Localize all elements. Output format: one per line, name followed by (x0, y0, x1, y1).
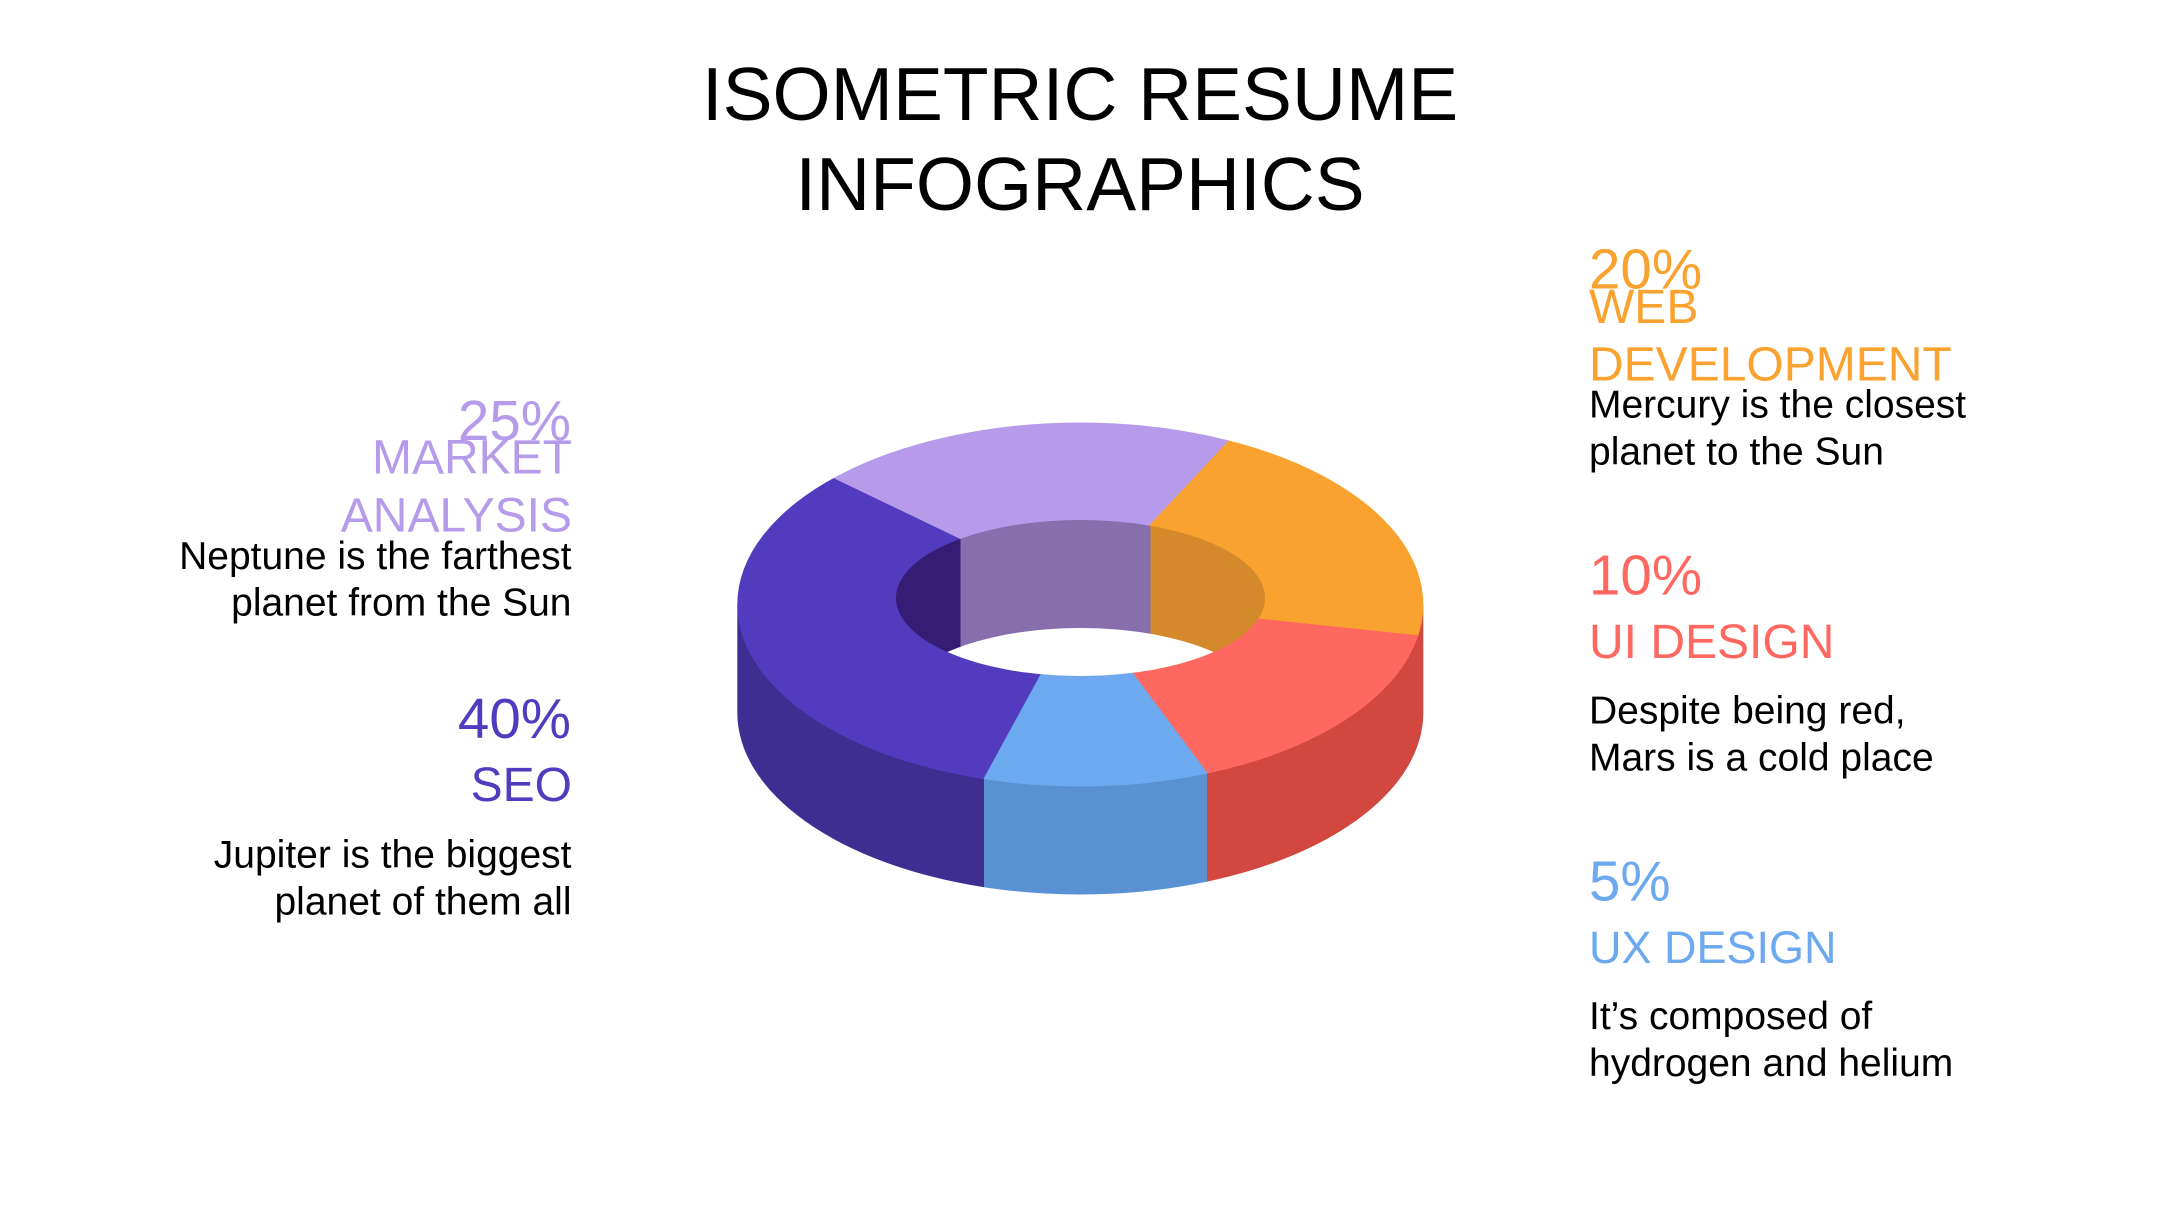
title: INFOGRAPHICS (795, 142, 1365, 226)
callout: SEO 40%: planet of them all (274, 880, 572, 924)
top segment: web development (1149, 440, 1424, 636)
callout: UX design 5%: UX DESIGN (1589, 922, 1837, 973)
callout: UI design 10%: Mars is a cold place (1589, 736, 1934, 780)
side wall: SEO (737, 604, 984, 887)
callout: UI design 10% (1589, 544, 1934, 780)
callout: UX design 5%: hydrogen and helium (1589, 1042, 1953, 1085)
top segment: UI design (1132, 618, 1418, 774)
side wall: UI design (1207, 604, 1423, 882)
callout: UI design 10%: Despite being red, (1589, 690, 1906, 732)
inner hole walls (896, 520, 1265, 676)
top segment: UX design (984, 672, 1208, 786)
top segment: market analysis (834, 422, 1228, 539)
top face segments (737, 422, 1424, 786)
callout: UX design 5%: It’s composed of (1589, 995, 1872, 1038)
callout: UI design 10%: 10% (1589, 544, 1702, 606)
callout: web development 20%: DEVELOPMENT (1589, 338, 1952, 392)
callout: market analysis 25%: MARKET (372, 432, 572, 484)
callout: market analysis 25%: 25% (458, 389, 571, 452)
callout: web development 20%: WEB (1589, 281, 1698, 334)
callout: market analysis 25%: Neptune is the farthest (179, 535, 572, 578)
side wall: UX design (984, 604, 1207, 894)
callout: SEO 40% (214, 687, 572, 924)
callout: market analysis 25%: planet from the Sun (231, 582, 572, 624)
callout: UI design 10%: UI DESIGN (1589, 616, 1834, 669)
callout: SEO 40%: 40% (458, 687, 571, 750)
callout: market analysis 25%: ANALYSIS (341, 490, 572, 542)
callout: UX design 5%: 5% (1589, 850, 1671, 912)
top segment: SEO (737, 478, 1040, 779)
title (702, 52, 1458, 226)
title: ISOMETRIC RESUME (702, 52, 1458, 136)
callout: market analysis 25% (179, 389, 572, 624)
callout: SEO 40%: Jupiter is the biggest (214, 834, 572, 876)
callout: SEO 40%: SEO (471, 759, 572, 812)
callout: web development 20%: planet to the Sun (1589, 430, 1884, 474)
callout: web development 20%: 20% (1589, 238, 1702, 300)
callout: web development 20%: Mercury is the closest (1589, 384, 1966, 426)
callout: UX design 5% (1589, 850, 1953, 1085)
callout: web development 20% (1589, 238, 1966, 474)
isometric donut chart (737, 422, 1424, 894)
